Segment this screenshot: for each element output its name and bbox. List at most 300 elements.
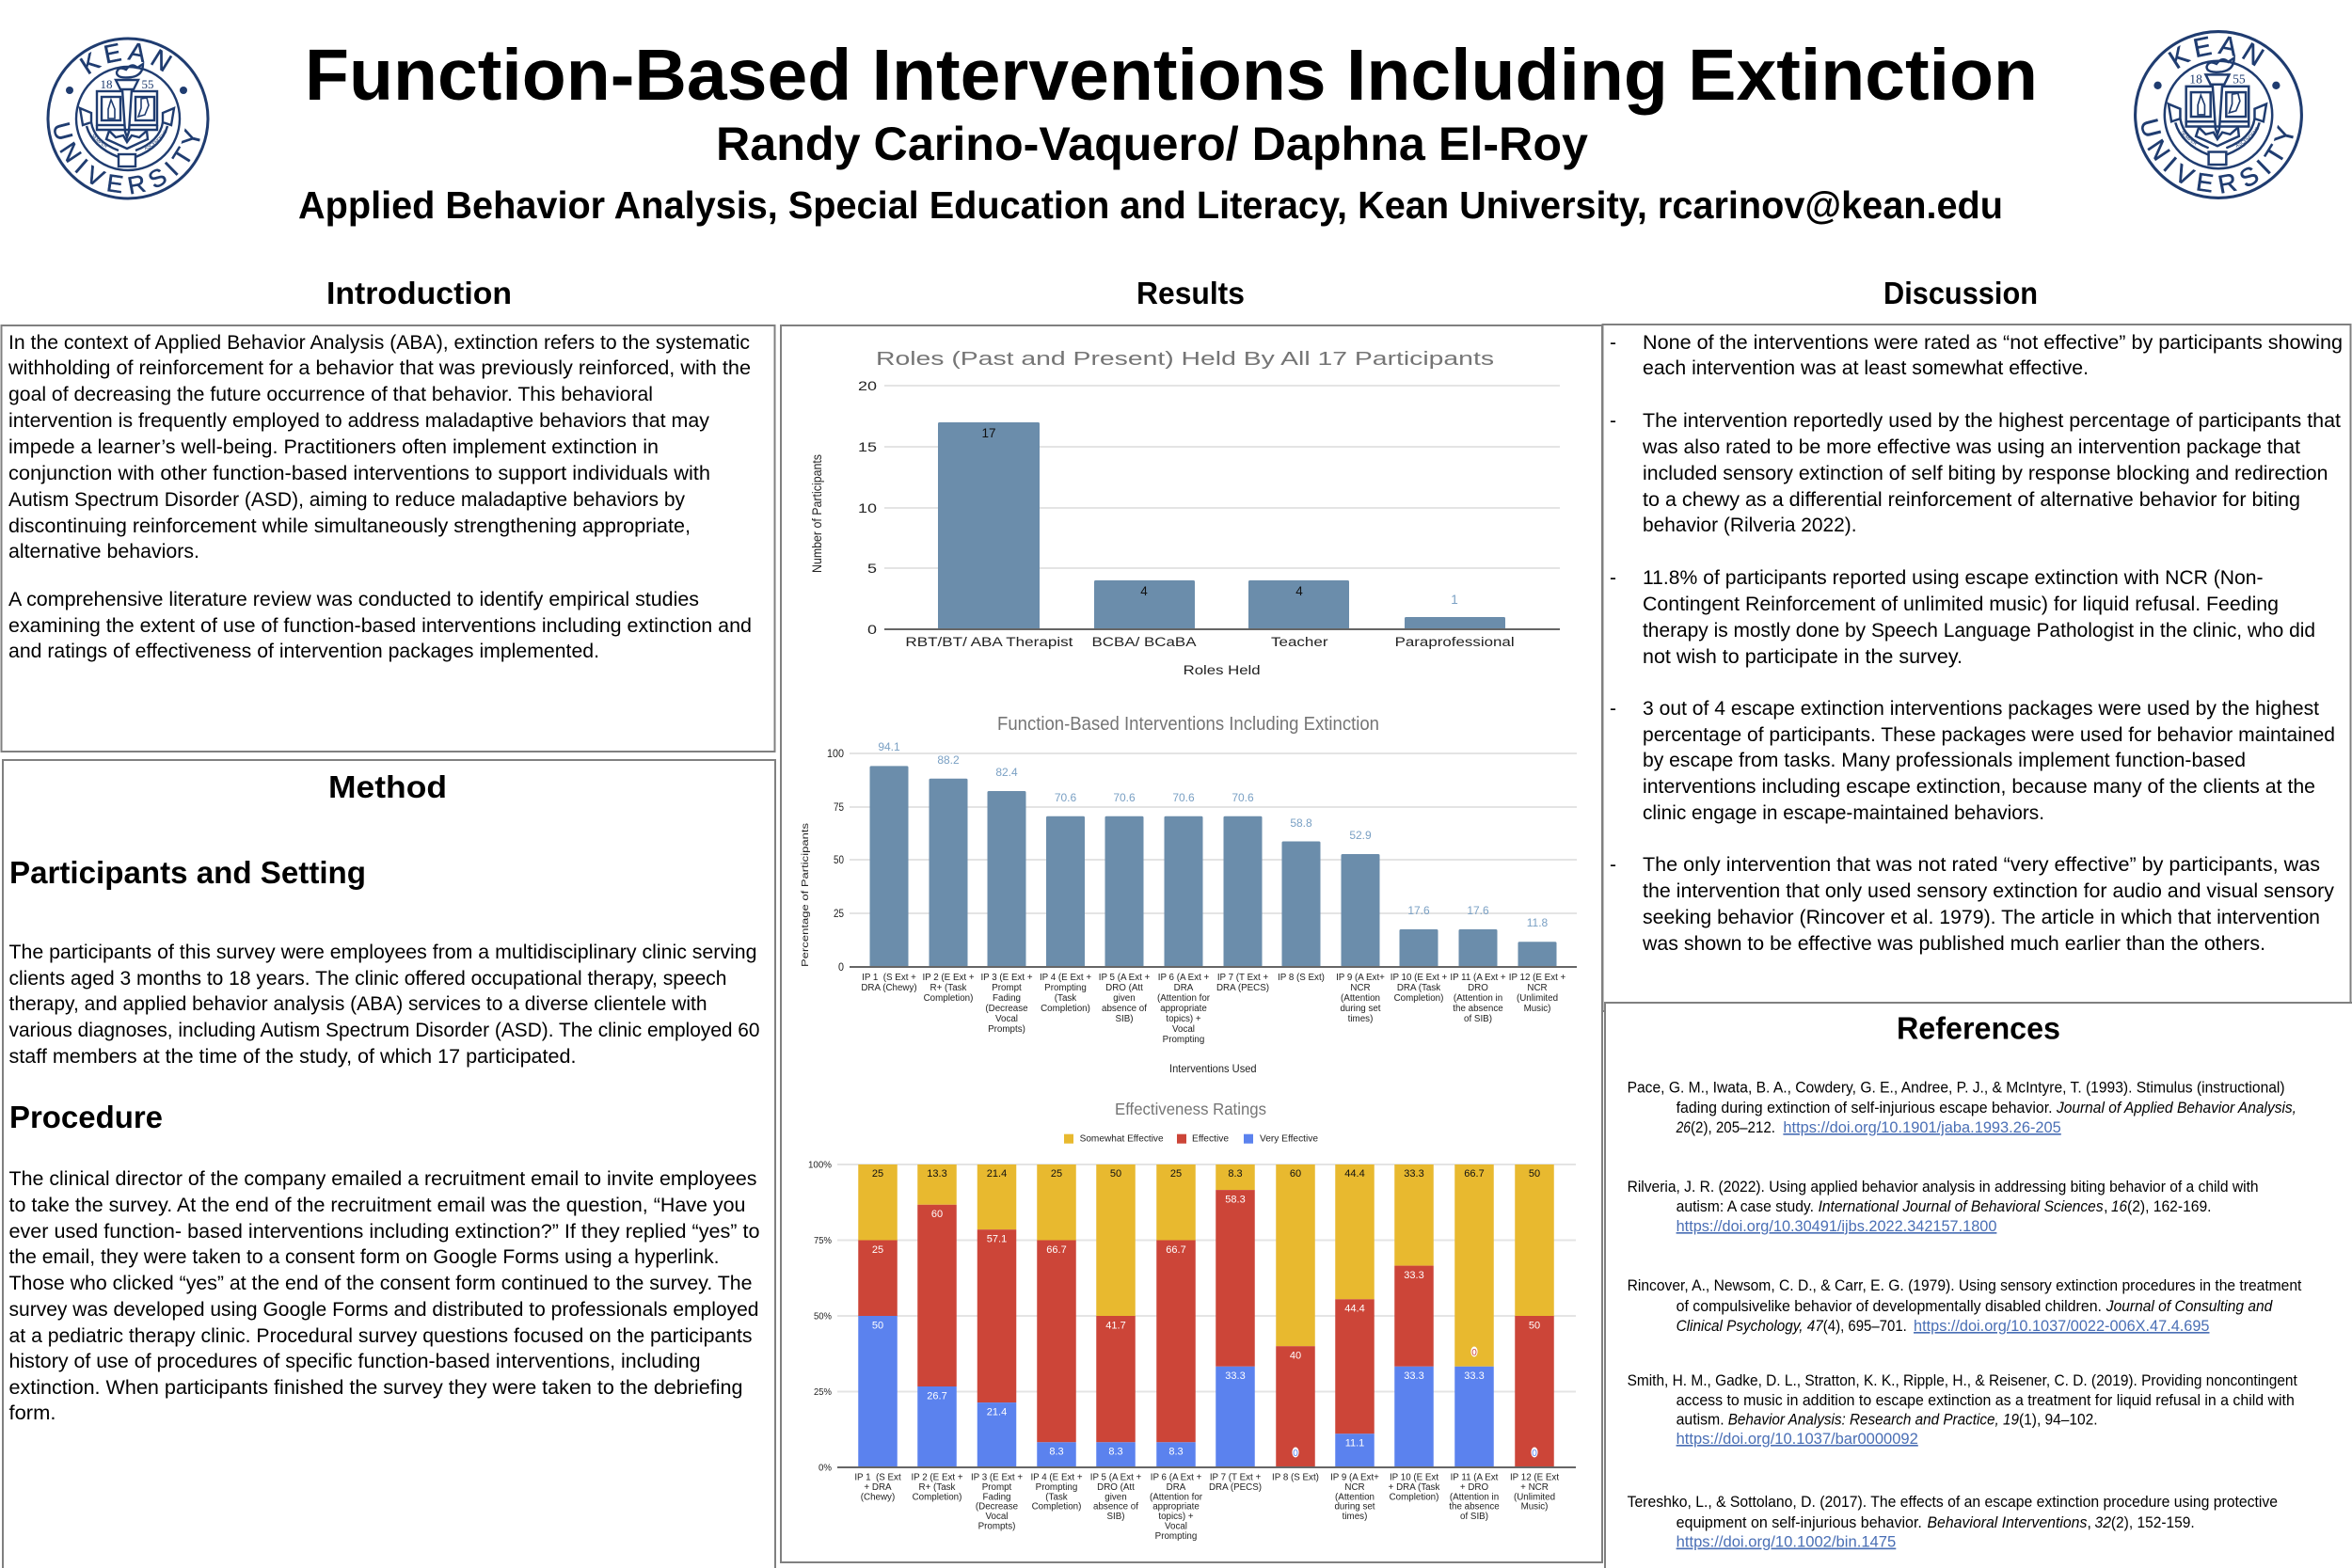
x axis labels: interventions: IP 3 (E Ext + (980, 973, 1033, 983)
x axis labels: interventions: DRO (1468, 983, 1488, 993)
x axis labels: effectiveness: topics) + (1158, 1512, 1194, 1522)
legend: Effective (1192, 1132, 1229, 1144)
bullet: only intervention not rated very effective: seeking behavior (Rincover et al. 1979). The article in which that intervention (1643, 907, 2320, 928)
bullet: highest percentage package: to a chewy as a differential reinforcement of alternative behavior for biting (1643, 489, 2300, 511)
reference: Smith et al. 2019 (1628, 1372, 2297, 1448)
segment labels: effective: 25 (872, 1244, 883, 1256)
value labels: interventions: 17.6 (1407, 904, 1430, 917)
y axis title: number of participants: Number of Participants (810, 454, 824, 573)
reference: Rilveria 2022: 16 (2111, 1198, 2128, 1215)
segment labels: very effective: 26.7 (927, 1390, 947, 1402)
x axis labels: interventions: (Attention for (1157, 993, 1211, 1004)
segment labels: effective: 66.7 (1046, 1244, 1067, 1256)
reference: Smith et al. 2019: (1), 94–102. (2019, 1411, 2098, 1428)
x axis labels: roles: RBT/BT/ ABA Therapist (905, 635, 1073, 649)
text block: procedure: The clinical director of the company emailed a recruitment email to invite employees (9, 1168, 756, 1190)
logo: Kean University seal (left): ASCENDENS (145, 130, 167, 150)
x axis labels: interventions: (Decrease (985, 1004, 1028, 1014)
logo: Kean University seal (right): KEAN (2168, 36, 2265, 70)
x axis labels: effectiveness: IP 9 (A Ext+ (1330, 1473, 1379, 1482)
segment labels: very effective: 0 (1293, 1449, 1298, 1459)
reference: Rincover et al. 1979: Clinical Psychology, 47 (1677, 1318, 1824, 1335)
x axis labels: effectiveness: Vocal (1165, 1521, 1187, 1531)
segment labels: effective: 60 (931, 1209, 943, 1220)
text block: introduction paragraph 2: A comprehensive literature review was conducted to identify empirical studies (8, 589, 699, 610)
text block: introduction paragraph 1: impede a learner’s well-being. Practitioners often implement extinction in (8, 436, 659, 458)
x axis labels: effectiveness: (Task (1045, 1492, 1068, 1502)
heading: Introduction: Introduction (326, 276, 512, 310)
reference: Smith et al. 2019: https://doi.org/10.1037/bar0000092 (1677, 1431, 1918, 1448)
affiliation: Applied Behavior Analysis, Special Education and Literacy, Kean University, rcarinov@kean.edu (298, 183, 2003, 227)
authors: Randy Carino-Vaquero/ Daphna El-Roy (716, 118, 1588, 170)
x axis labels: interventions: IP 12 (E Ext + (1509, 973, 1566, 983)
x axis labels: interventions: R+ (Task (930, 983, 967, 993)
x axis labels: interventions: Completion) (1394, 993, 1443, 1004)
reference: Rincover et al. 1979: Journal of Consulting and (2106, 1298, 2273, 1315)
segment labels: somewhat effective: 60 (1290, 1168, 1301, 1180)
reference: Rilveria 2022: autism: A case study. (1677, 1198, 1814, 1215)
text block: introduction paragraph 2 (8, 589, 752, 662)
panel: references (1605, 1003, 2352, 1568)
text block: participants and setting: therapy, and applied behavior analysis (ABA) services to a diverse clientele with (9, 993, 707, 1015)
text block: introduction paragraph 1: intervention is frequently employed to address maladaptive behaviors that may (8, 410, 710, 432)
reference: Rincover et al. 1979: Rincover, A., Newsom, C. D., & Carr, E. G. (1979). Using sensory extinction procedures in the treatment (1628, 1277, 2302, 1294)
segment labels: somewhat effective: 25 (1051, 1168, 1062, 1180)
bullet: escape extinction packages: percentage of participants. These packages were used for behavior maintained (1643, 724, 2335, 746)
y axis labels: effectiveness: 50% (814, 1311, 832, 1323)
segment labels: effective: 50 (1529, 1321, 1540, 1332)
text block: introduction paragraph 1: Autism Spectrum Disorder (ASD), aiming to reduce maladaptive behaviors by (8, 489, 685, 511)
x axis labels: effectiveness: + NCR (1520, 1482, 1549, 1493)
x axis labels: roles: Teacher (1271, 635, 1328, 649)
text block: participants and setting: The participants of this survey were employees from a multidisciplinary clinic serving (9, 942, 757, 963)
logo: Kean University seal (left): 18 (100, 77, 113, 91)
reference: Smith et al. 2019: Smith, H. M., Gadke, D. L., Stratton, K. K., Ripple, H., & Reisener, C. D. (2019). Providing noncontingent (1628, 1372, 2297, 1389)
x axis labels: roles: Paraprofessional (1395, 635, 1515, 649)
logo: Kean University seal (right) (2134, 30, 2303, 199)
chart title: effectiveness: Effectiveness Ratings (1115, 1100, 1266, 1118)
x axis labels: interventions: DRO (Att (1105, 983, 1143, 993)
segment labels: very effective: 21.4 (987, 1407, 1007, 1418)
bullet: none rated not effective: None of the interventions were rated as “not effective” by participants showing (1643, 332, 2343, 354)
bullet: none rated not effective: - (1610, 332, 1616, 354)
segment labels: very effective: 8.3 (1168, 1447, 1184, 1458)
x axis labels: interventions: IP 9 (A Ext+ (1336, 973, 1385, 983)
value labels: interventions: 52.9 (1349, 829, 1372, 842)
reference: Pace et al. 1993: Pace, G. M., Iwata, B. A., Cowdery, G. E., Andree, P. J., & McIntyre, T. (1993). Stimulus (instructional) (1628, 1079, 2285, 1096)
logo: Kean University seal (right): ASCENDENS (2235, 127, 2259, 148)
reference: Tereshko and Sottolano 2017: equipment on self-injurious behavior. (1677, 1514, 1922, 1531)
y axis labels: interventions: 25 (834, 907, 844, 920)
x axis labels: effectiveness: NCR (1344, 1482, 1365, 1493)
reference: Pace et al. 1993: https://doi.org/10.1901/jaba.1993.26-205 (1783, 1119, 2061, 1136)
text block: introduction paragraph 1: In the context of Applied Behavior Analysis (ABA), extinction refers to the systematic (8, 332, 750, 354)
x axis labels: effectiveness: (Attention (1335, 1492, 1375, 1502)
segment labels: effective: 0 (1471, 1348, 1477, 1358)
x axis labels: effectiveness: IP 10 (E Ext (1390, 1473, 1438, 1482)
y axis labels: effectiveness: 25% (814, 1386, 832, 1398)
reference: Tereshko and Sottolano 2017: , (2087, 1514, 2091, 1531)
reference: Pace et al. 1993: (2), 205–212. (1691, 1119, 1775, 1136)
x axis labels: interventions: appropriate (1160, 1004, 1207, 1014)
bullet: escape extinction with NCR: not wish to participate in the survey. (1643, 646, 1963, 668)
reference: Rincover et al. 1979: https://doi.org/10.1037/0022-006X.47.4.695 (1914, 1318, 2209, 1335)
text block: procedure: history of use of procedures of specific function-based interventions, including (9, 1351, 700, 1372)
x axis labels: interventions: Prompting (1163, 1035, 1204, 1045)
y axis labels: roles: 15 (858, 440, 877, 454)
text block: procedure: Those who clicked “yes” at the end of the consent form continued to the survey. The (9, 1273, 752, 1294)
logo: Kean University seal (left): 55 (141, 77, 154, 91)
stacked bar chart: effectiveness ratings (808, 1100, 1576, 1542)
bar chart: roles held (810, 349, 1560, 677)
logo: Kean University seal (right): 55 (2233, 72, 2246, 87)
stacked bars: very effective (858, 1316, 1494, 1467)
x axis labels: interventions: times) (1348, 1014, 1373, 1024)
reference: Pace et al. 1993 (1628, 1079, 2296, 1136)
x axis labels: interventions: NCR (1350, 983, 1371, 993)
bullet: escape extinction with NCR: - (1610, 567, 1616, 589)
x axis labels: interventions: DRA (Chewy) (861, 983, 917, 993)
heading: References: References (1897, 1010, 2060, 1046)
x axis labels: interventions: during set (1340, 1004, 1381, 1014)
panel: introduction (2, 325, 775, 752)
reference: Rilveria 2022 (1628, 1179, 2259, 1235)
value labels: interventions: 94.1 (878, 740, 900, 753)
heading: Method: Method (328, 769, 447, 804)
x axis labels: interventions: IP 7 (T Ext + (1217, 973, 1268, 983)
x axis labels: interventions: Prompting (1044, 983, 1087, 993)
value labels: interventions: 70.6 (1055, 791, 1077, 804)
bullet: escape extinction with NCR (1610, 567, 2315, 668)
segment labels: somewhat effective (872, 1168, 1540, 1180)
bullet: escape extinction with NCR: Contingent Reinforcement of unlimited music) for liquid refusal. Feeding (1643, 594, 2279, 615)
segment labels: somewhat effective: 66.7 (1464, 1168, 1485, 1180)
x axis labels: interventions: of SIB) (1464, 1014, 1492, 1024)
bullet: only intervention not rated very effective (1610, 854, 2334, 955)
segment labels: somewhat effective: 33.3 (1404, 1168, 1424, 1180)
y axis labels: interventions (827, 747, 844, 974)
text block: introduction paragraph 1: discontinuing reinforcement while simultaneously strengthening appropriate, (8, 515, 691, 537)
legend: Very Effective (1260, 1132, 1318, 1144)
legend: Somewhat Effective (1080, 1132, 1164, 1144)
x axis labels: interventions: (Attention in (1454, 993, 1502, 1004)
x axis labels: interventions: Prompts) (988, 1024, 1025, 1035)
logo: Kean University seal (left): UNIVERSITY (54, 122, 200, 194)
segment labels: effective: 40 (1290, 1351, 1301, 1362)
y axis labels: interventions: 50 (834, 853, 844, 866)
reference: Pace et al. 1993: 26 (1676, 1119, 1692, 1136)
text block: procedure: extinction. When participants finished the survey they were taken to the debriefing (9, 1377, 743, 1399)
text block: introduction paragraph 1: withholding of reinforcement for a behavior that was previously reinforced, with the (8, 357, 751, 379)
bar chart: interventions used (800, 714, 1577, 1075)
value labels: interventions: 17.6 (1467, 904, 1489, 917)
bullet: only intervention not rated very effective: was shown to be effective was published much earlier than the others. (1642, 933, 2265, 955)
x axis labels: effectiveness: (Attention in (1450, 1492, 1499, 1502)
x axis labels: interventions: NCR (1527, 983, 1548, 993)
x axis labels: interventions: Vocal (995, 1014, 1018, 1024)
segment labels: somewhat effective: 50 (1529, 1168, 1540, 1180)
heading: Procedure: Procedure (9, 1100, 163, 1134)
y axis labels: effectiveness: 75% (814, 1235, 832, 1246)
value labels: roles: 4 (1140, 584, 1148, 598)
segment labels: very effective: 0 (1532, 1449, 1537, 1459)
x axis labels: effectiveness: (Chewy) (861, 1492, 895, 1502)
bullet: escape extinction packages: by escape from tasks. Many professionals implement function-based (1643, 750, 2246, 771)
bullet: highest percentage package: - (1610, 410, 1616, 432)
text block: participants and setting: clients aged 3 months to 18 years. The clinic offered occupational therapy, speech (9, 968, 726, 990)
x axis labels: interventions: (Unlimited (1517, 993, 1558, 1004)
x axis labels: effectiveness: IP 1 (S Ext (854, 1473, 901, 1482)
segment labels: somewhat effective: 50 (1110, 1168, 1121, 1180)
segment labels: very effective: 50 (872, 1321, 883, 1332)
x axis labels: effectiveness: absence of (1093, 1502, 1138, 1513)
text block: introduction paragraph 1: alternative behaviors. (8, 541, 199, 562)
x axis labels: effectiveness: Music) (1521, 1502, 1548, 1513)
text block: procedure: the email, they were taken to a consent form on Google Forms using a hyperlink. (9, 1246, 719, 1268)
x axis labels: interventions: IP 6 (A Ext + (1158, 973, 1210, 983)
x axis labels: effectiveness: R+ (Task (919, 1482, 956, 1493)
segment labels: somewhat effective: 25 (1170, 1168, 1182, 1180)
x axis labels: effectiveness: Completion) (913, 1492, 961, 1502)
x axis labels: effectiveness: + DRO (1460, 1482, 1488, 1493)
reference: Tereshko and Sottolano 2017: https://doi.org/10.1002/bin.1475 (1677, 1534, 1896, 1551)
x axis labels: effectiveness: Fading (983, 1492, 1010, 1502)
x axis labels: effectiveness: IP 7 (T Ext + (1210, 1473, 1261, 1482)
bullet: none rated not effective (1610, 332, 2343, 379)
text block: procedure: ever used function- based interventions including extinction?” If they replied “yes” to (9, 1221, 760, 1243)
x axis labels: interventions: DRA (1174, 983, 1194, 993)
bullet: escape extinction with NCR: therapy is mostly done by Speech Language Pathologist in the clinic, who did (1643, 620, 2315, 641)
x axis labels: effectiveness: (Decrease (976, 1502, 1019, 1513)
x axis labels: interventions: IP 11 (A Ext + (1450, 973, 1506, 983)
reference: Rincover et al. 1979: (4), 695–701. (1823, 1318, 1907, 1335)
x axis labels: roles: BCBA/ BCaBA (1091, 635, 1197, 649)
segment labels: very effective: 8.3 (1108, 1447, 1123, 1458)
value labels: roles: 4 (1295, 584, 1303, 598)
x axis labels: effectiveness: Completion) (1390, 1492, 1438, 1502)
reference: Rincover et al. 1979 (1628, 1277, 2302, 1335)
text block: procedure: form. (9, 1402, 56, 1424)
segment labels: very effective: 33.3 (1464, 1370, 1485, 1382)
x axis labels: effectiveness: + DRA (Task (1389, 1482, 1439, 1493)
y axis labels: interventions: 75 (834, 800, 844, 814)
segment labels: somewhat effective: 44.4 (1344, 1168, 1365, 1180)
bullet: only intervention not rated very effective: - (1610, 854, 1616, 876)
text block: procedure: to take the survey. At the end of the recruitment email was the question, “Have you (9, 1195, 745, 1216)
logo: Kean University seal (right): SEMPER (2181, 131, 2197, 145)
bars: interventions (869, 766, 1556, 967)
bullet: escape extinction with NCR: 11.8% of participants reported using escape extinction with NCR (Non- (1643, 567, 2264, 589)
reference: Rilveria 2022: Rilveria, J. R. (2022). Using applied behavior analysis in addressing biting behavior of a child with (1628, 1179, 2259, 1196)
x axis labels: effectiveness: (Unlimited (1514, 1492, 1555, 1502)
heading: Results: Results (1136, 276, 1245, 310)
segment labels: very effective: 8.3 (1049, 1447, 1064, 1458)
segment labels: somewhat effective: 21.4 (987, 1168, 1007, 1180)
bullet: highest percentage package (1610, 410, 2341, 536)
x axis labels: interventions: IP 5 (A Ext + (1099, 973, 1151, 983)
logo: Kean University seal (left): SEMPER (92, 134, 107, 149)
y axis labels: interventions: 0 (838, 960, 844, 974)
segment labels: effective: 33.3 (1404, 1270, 1424, 1281)
text block: introduction paragraph 1: goal of decreasing the future occurrence of that behavior. This behavioral (8, 384, 653, 405)
x axis labels: interventions: IP 8 (S Ext) (1278, 973, 1325, 983)
bullet: escape extinction packages: clinic engage in escape-maintained behaviors. (1643, 802, 2044, 824)
stacked bars: effective (858, 1190, 1554, 1467)
x axis labels: effectiveness: IP 12 (E Ext (1510, 1473, 1559, 1482)
text block: participants and setting: staff members at the time of the study, of which 17 participated. (9, 1046, 577, 1068)
x axis labels: effectiveness: DRO (Att (1097, 1482, 1135, 1493)
value labels: roles: 17 (981, 426, 996, 440)
heading: Discussion: Discussion (1883, 276, 2038, 310)
y axis labels: interventions: 100 (827, 747, 844, 760)
x axis labels: effectiveness: IP 2 (E Ext + (911, 1473, 963, 1482)
y axis labels: roles (858, 379, 877, 637)
segment labels: very effective: 33.3 (1225, 1370, 1246, 1382)
heading: Participants and Setting: Participants and Setting (9, 855, 366, 890)
text block: introduction paragraph 1: conjunction with other function-based interventions to support individuals with (8, 463, 710, 484)
segment labels: somewhat effective: 25 (872, 1168, 883, 1180)
x axis labels: effectiveness: Prompting (1155, 1531, 1197, 1542)
bullet: highest percentage package: was also rated to be more effective was using an intervention package that (1642, 436, 2300, 458)
x axis labels: effectiveness: IP 8 (S Ext) (1272, 1473, 1319, 1482)
value labels: interventions: 82.4 (995, 766, 1018, 779)
x axis title: roles held: Roles Held (1184, 663, 1261, 677)
x axis labels: effectiveness: + DRA (864, 1482, 892, 1493)
x axis labels: effectiveness: IP 6 (A Ext + (1151, 1473, 1202, 1482)
y axis title: percentage of participants: Percentage of Participants (800, 823, 811, 967)
x axis labels: effectiveness: the absence (1449, 1502, 1500, 1513)
x axis labels: interventions: DRA (Task (1397, 983, 1440, 993)
bullet: escape extinction packages (1610, 698, 2335, 824)
x axis labels: interventions: topics) + (1166, 1014, 1201, 1024)
x axis labels: interventions: Completion) (1041, 1004, 1090, 1014)
segment labels: effective: 57.1 (987, 1234, 1007, 1245)
logo: Kean University seal (right): UNIVERSITY (2141, 119, 2294, 194)
text block: procedure: survey was developed using Google Forms and distributed to professionals employed (9, 1299, 759, 1321)
panel: method (3, 760, 775, 1568)
value labels: interventions: 70.6 (1113, 791, 1136, 804)
x axis labels: interventions: the absence (1453, 1004, 1503, 1014)
legend (1064, 1132, 1318, 1144)
x axis labels: interventions: IP 1 (S Ext + (862, 973, 916, 983)
bullet: highest percentage package: The intervention reportedly used by the highest percentage of participants that (1643, 410, 2341, 432)
bars: roles (938, 422, 1505, 629)
bullet: highest percentage package: included sensory extinction of self biting by response blocking and redirection (1643, 463, 2328, 484)
reference: Pace et al. 1993: fading during extinction of self-injurious escape behavior. (1677, 1100, 2053, 1117)
x axis labels: effectiveness (854, 1473, 1559, 1542)
x axis labels: interventions: Vocal (1172, 1024, 1195, 1035)
x axis labels: interventions: Prompt (992, 983, 1022, 993)
panel: results (781, 325, 1602, 1562)
x axis title: interventions used: Interventions Used (1169, 1062, 1257, 1075)
stacked bars: somewhat effective (858, 1164, 1554, 1367)
x axis labels: interventions: (Task (1055, 993, 1076, 1004)
text block: participants and setting (9, 942, 760, 1068)
x axis labels: interventions (861, 973, 1566, 1045)
text block: participants and setting: various diagnoses, including Autism Spectrum Disorder (ASD). The clinic employed 60 (9, 1020, 760, 1041)
chart title: roles: Roles (Past and Present) Held By All 17 Participants (876, 349, 1494, 370)
reference: Rilveria 2022: International Journal of Behavioral Sciences (1819, 1198, 2104, 1215)
reference: Rilveria 2022: https://doi.org/10.30491/ijbs.2022.342157.1800 (1677, 1218, 1996, 1235)
x axis labels: interventions: Completion) (924, 993, 973, 1004)
bullet: none rated not effective: each intervention was at least somewhat effective. (1643, 357, 2089, 379)
x axis labels: effectiveness: (Attention for (1150, 1492, 1203, 1502)
bullet: escape extinction packages: 3 out of 4 escape extinction interventions packages were used by the highest (1643, 698, 2319, 720)
x axis labels: effectiveness: of SIB) (1460, 1512, 1488, 1522)
y axis labels: roles: 5 (867, 562, 877, 576)
panel: discussion (1603, 325, 2350, 1011)
segment labels: very effective: 11.1 (1345, 1437, 1364, 1449)
y axis labels: effectiveness (808, 1159, 832, 1473)
x axis labels: effectiveness: Vocal (986, 1512, 1008, 1522)
x axis labels: interventions: (Attention (1341, 993, 1380, 1004)
x axis labels: effectiveness: SIB) (1106, 1512, 1125, 1522)
segment labels: effective: 44.4 (1344, 1304, 1365, 1315)
reference: Smith et al. 2019: Behavior Analysis: Research and Practice, 19 (1728, 1411, 2019, 1428)
y axis labels: effectiveness: 100% (808, 1159, 832, 1170)
segment labels: effective: 41.7 (1105, 1321, 1126, 1332)
x axis labels: interventions: Fading (993, 993, 1021, 1004)
x axis labels: effectiveness: given (1104, 1492, 1127, 1502)
x axis labels: effectiveness: IP 3 (E Ext + (971, 1473, 1023, 1482)
text block: introduction paragraph 2: examining the extent of use of function-based interventions including extinction and (8, 615, 752, 637)
bullet: escape extinction packages: interventions including escape extinction, because many of the clients at the (1643, 776, 2315, 798)
chart title: interventions: Function-Based Interventions Including Extinction (997, 714, 1379, 735)
reference: Smith et al. 2019: access to music in addition to escape extinction as a treatment for liquid refusal in a child with (1677, 1392, 2295, 1409)
x axis labels: interventions: Music) (1524, 1004, 1550, 1014)
x axis labels: effectiveness: during set (1334, 1502, 1375, 1513)
bullet: escape extinction packages: - (1610, 698, 1616, 720)
reference: Rincover et al. 1979: of compulsivelike behavior of developmentally disabled children. (1677, 1298, 2102, 1315)
x axis labels: effectiveness: Prompt (982, 1482, 1012, 1493)
title: Function-Based Interventions Including Extinction (305, 35, 2038, 116)
value labels: interventions: 88.2 (937, 753, 960, 767)
y axis labels: effectiveness: 0% (818, 1462, 832, 1473)
reference: Pace et al. 1993: Journal of Applied Behavior Analysis, (2056, 1100, 2296, 1117)
segment labels: very effective: 33.3 (1404, 1370, 1424, 1382)
value labels: interventions: 58.8 (1290, 816, 1312, 830)
segment labels: effective: 58.3 (1225, 1195, 1246, 1206)
reference: Tereshko and Sottolano 2017: (2), 152-159. (2111, 1514, 2195, 1531)
x axis labels: interventions: IP 10 (E Ext + (1391, 973, 1448, 983)
segment labels: very effective (872, 1321, 1538, 1459)
x axis labels: interventions: DRA (PECS) (1216, 983, 1269, 993)
y axis labels: roles: 20 (858, 379, 877, 393)
reference: Rilveria 2022: (2), 162-169. (2127, 1198, 2211, 1215)
text block: procedure: at a pediatric therapy clinic. Procedural survey questions focused on the participants (9, 1325, 753, 1347)
reference: Tereshko and Sottolano 2017: Tereshko, L., & Sottolano, D. (2017). The effects of an escape extinction procedure using protective (1628, 1494, 2278, 1511)
x axis labels: effectiveness: IP 11 (A Ext (1451, 1473, 1499, 1482)
x axis labels: interventions: IP 2 (E Ext + (922, 973, 975, 983)
x axis labels: effectiveness: Prompts) (978, 1521, 1015, 1531)
logo: Kean University seal (right): 18 (2189, 72, 2202, 87)
segment labels: effective: 66.7 (1166, 1244, 1186, 1256)
reference: Smith et al. 2019: autism. (1677, 1411, 1724, 1428)
value labels: interventions: 11.8 (1527, 916, 1549, 929)
x axis labels: interventions: SIB) (1115, 1014, 1134, 1024)
bullet: only intervention not rated very effective: the intervention that only used sensory extinction for audio and visual sensory (1643, 880, 2334, 902)
x axis labels: effectiveness: DRA (1167, 1482, 1186, 1493)
x axis labels: effectiveness: IP 5 (A Ext + (1090, 1473, 1142, 1482)
reference: Tereshko and Sottolano 2017 (1628, 1494, 2278, 1551)
value labels: interventions: 70.6 (1172, 791, 1195, 804)
segment labels: somewhat effective: 8.3 (1228, 1168, 1243, 1180)
y axis labels: roles: 0 (867, 623, 877, 637)
logo: Kean University seal (left): KEAN (79, 43, 173, 75)
reference: Tereshko and Sottolano 2017: 32 (2094, 1514, 2111, 1531)
x axis labels: effectiveness: times) (1343, 1512, 1367, 1522)
reference: Tereshko and Sottolano 2017: Behavioral Interventions (1927, 1514, 2087, 1531)
